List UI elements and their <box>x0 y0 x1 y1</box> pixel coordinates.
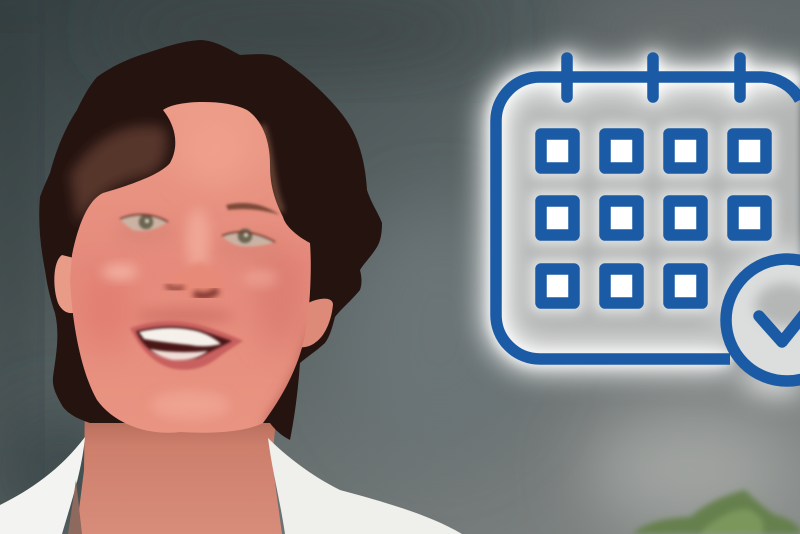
eyebrow: right <box>226 203 280 215</box>
man <box>0 40 462 534</box>
skin shading <box>170 129 232 172</box>
check badge <box>726 259 800 381</box>
ears <box>54 255 76 313</box>
interior panel <box>497 78 800 359</box>
nose <box>166 262 224 298</box>
face <box>70 102 311 433</box>
glow <box>496 53 800 383</box>
date grid <box>541 134 766 303</box>
shirt <box>0 437 462 534</box>
plant <box>632 490 800 534</box>
calendar frame <box>496 77 800 359</box>
grid glow <box>530 124 776 313</box>
hair <box>39 40 382 440</box>
binder rings <box>567 58 740 97</box>
neck <box>76 400 282 534</box>
eye: right <box>222 228 275 246</box>
icon: calendar with check <box>496 53 800 383</box>
mouth <box>130 321 243 370</box>
eye: left <box>120 214 168 231</box>
